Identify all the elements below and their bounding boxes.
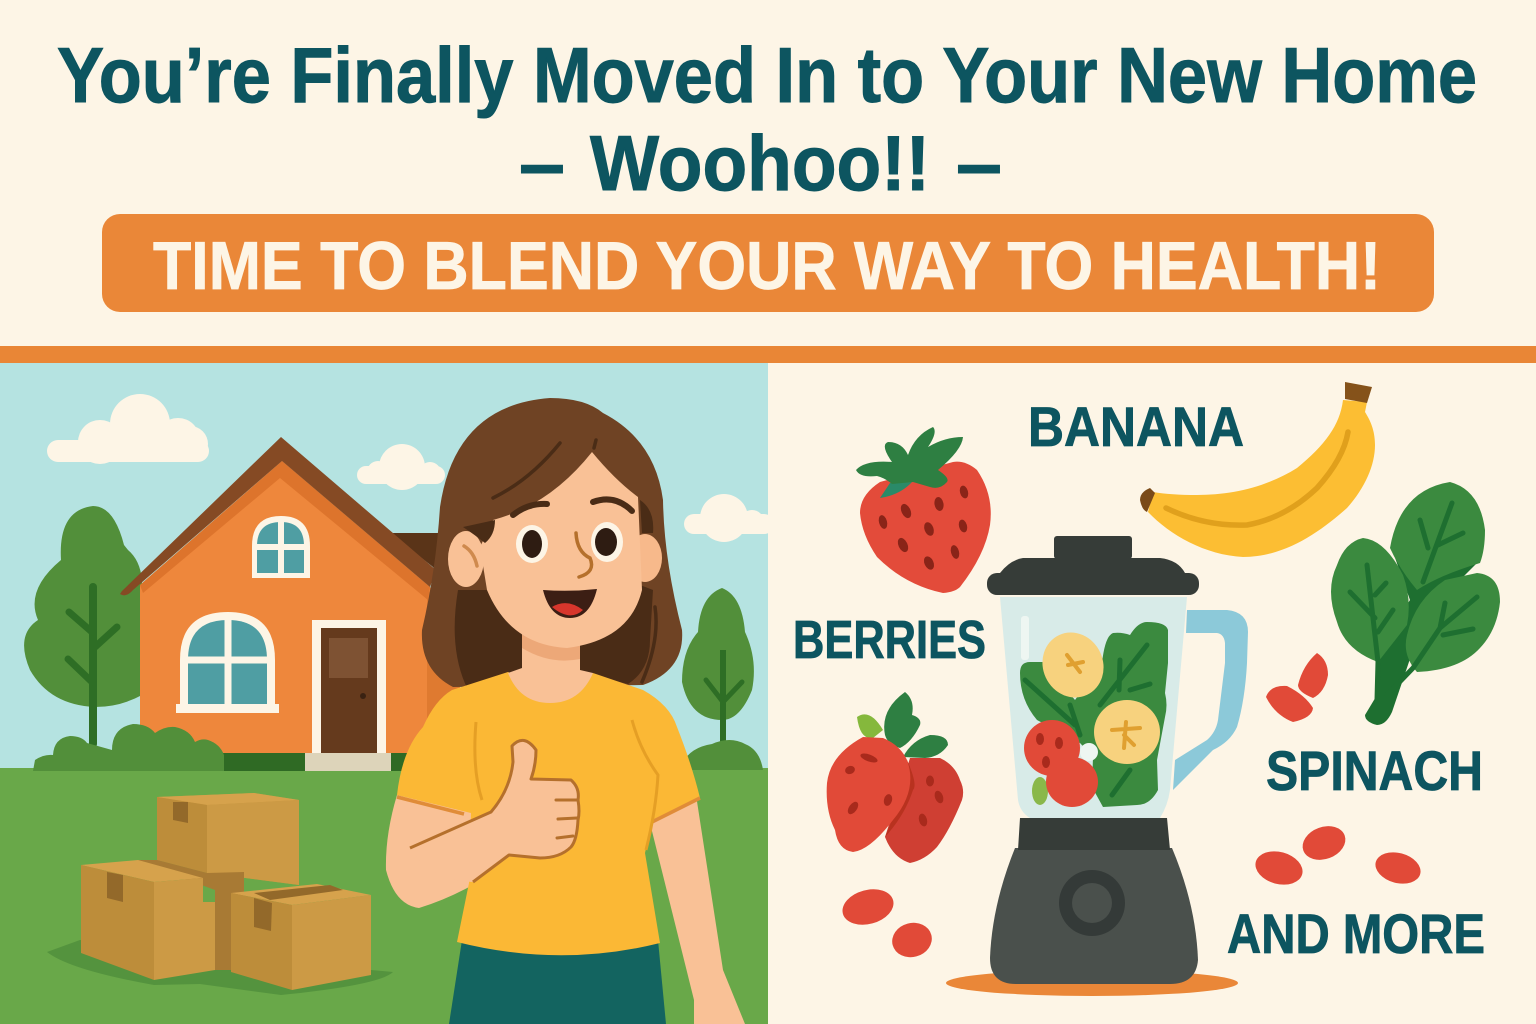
- icon: strawberry top: [856, 427, 991, 593]
- title: –: [519, 119, 565, 207]
- hair back: [422, 398, 682, 687]
- neck: [508, 625, 593, 703]
- icon: attic window: [252, 516, 310, 578]
- icon: arched window: [176, 612, 279, 713]
- banner: time to blend: TIME TO BLEND YOUR WAY TO HEALTH!: [153, 228, 1381, 304]
- banana slices: [1032, 622, 1114, 708]
- label: banana: BANANA: [1028, 395, 1244, 458]
- illustration: woman with thumbs up: [386, 398, 745, 1024]
- white gap: [1080, 743, 1098, 761]
- berries in jar: [1024, 720, 1080, 776]
- icon: clouds: [47, 394, 774, 542]
- icon: house: [120, 437, 460, 771]
- icon: banana: [1140, 382, 1375, 557]
- label: and more: AND MORE: [1227, 902, 1485, 965]
- icon: moving boxes: [47, 793, 393, 995]
- icon: blender: [946, 536, 1248, 996]
- eyes: [513, 499, 632, 577]
- jar: [1000, 597, 1187, 818]
- shirt: [397, 672, 700, 955]
- shadow: [946, 970, 1238, 996]
- icon: spinach: [1331, 482, 1500, 725]
- label: spinach: SPINACH: [1266, 739, 1483, 802]
- base: [990, 848, 1198, 984]
- mouth: [543, 589, 597, 618]
- lid: [1000, 558, 1185, 573]
- trousers: [449, 940, 666, 1024]
- title: –: [956, 119, 1002, 207]
- label: berries: BERRIES: [793, 610, 986, 670]
- icon: hedge: [33, 724, 224, 771]
- face: [480, 452, 642, 648]
- icon: right tree: [682, 588, 754, 750]
- icon: right hedge: [680, 740, 763, 770]
- hair shadow: [455, 585, 653, 690]
- icon: berry pieces left: [838, 884, 936, 962]
- green piece: [1032, 777, 1048, 805]
- left arm: [386, 795, 520, 908]
- icon: strawberries bottom: [827, 692, 963, 863]
- title: [57, 31, 1477, 207]
- panel: ingredients: [793, 382, 1500, 996]
- panel: new home scene: [0, 363, 774, 1024]
- hair details: [463, 500, 653, 543]
- leaves in jar: [1020, 622, 1168, 807]
- title: Woohoo!!: [590, 119, 930, 207]
- divider bar: [0, 346, 1536, 363]
- highlight: [1021, 616, 1029, 660]
- thumbs up hand: [410, 740, 579, 882]
- right arm: [648, 795, 745, 1024]
- handle: [1173, 610, 1248, 790]
- ears: [448, 531, 484, 587]
- icon: door: [312, 620, 386, 753]
- icon: berry pieces right: [1252, 653, 1424, 890]
- icon: left tree: [24, 506, 142, 748]
